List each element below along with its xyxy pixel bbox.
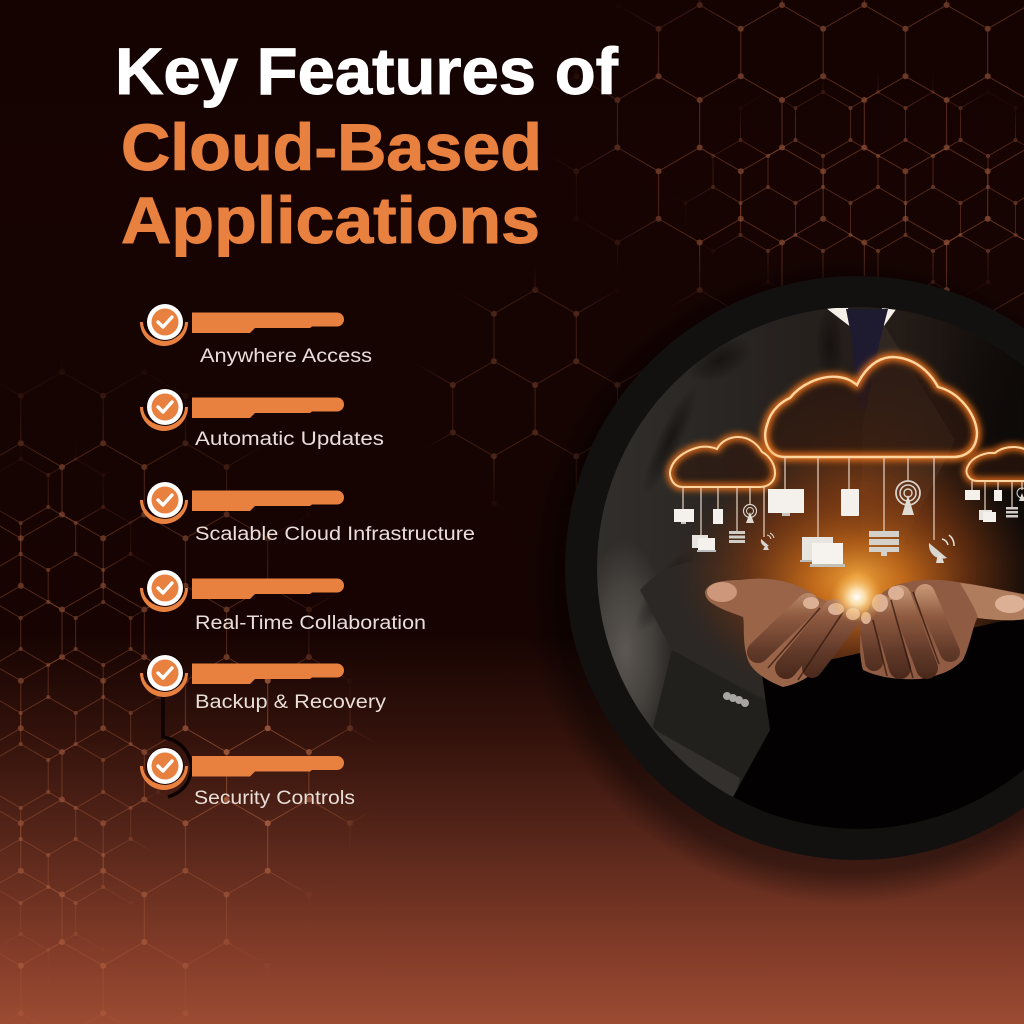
orange label bar bbox=[192, 312, 344, 333]
icon: server bbox=[729, 531, 745, 543]
thumb highlight bbox=[960, 583, 1024, 620]
device icons: large cloud bbox=[768, 481, 954, 567]
shirt collar bbox=[827, 308, 896, 326]
thumb and palm bbox=[860, 580, 1024, 679]
background hexagon network: top right bbox=[421, 0, 1024, 505]
icon: check badge bbox=[140, 481, 188, 524]
checklist item: Automatic Updates bbox=[140, 388, 384, 450]
photo: businessman holding glowing clouds bbox=[580, 300, 1024, 840]
suit shading bbox=[580, 300, 1024, 800]
icon: monitor bbox=[965, 490, 980, 500]
background hexagon network: left and bottom bbox=[0, 369, 370, 1016]
label: Automatic Updates bbox=[195, 429, 384, 450]
label: Backup & Recovery bbox=[195, 692, 387, 713]
orange label bar bbox=[192, 398, 344, 418]
label: Security Controls bbox=[194, 788, 355, 809]
suit base bbox=[597, 307, 951, 736]
icon: check badge bbox=[140, 747, 188, 790]
orange label bar bbox=[192, 756, 344, 776]
title line: Applications: Applications bbox=[121, 183, 540, 257]
thumb and palm bbox=[705, 578, 828, 687]
lower black shadow bbox=[730, 615, 1024, 840]
circle shadow bbox=[523, 255, 1024, 905]
checklist item: Anywhere Access bbox=[140, 303, 372, 367]
label: Real-Time Collaboration bbox=[195, 613, 426, 634]
icon: monitor bbox=[768, 489, 804, 516]
icon: tablet bbox=[994, 490, 1002, 501]
title bbox=[115, 34, 619, 257]
checklist item: Real-Time Collaboration bbox=[140, 569, 426, 634]
orange label bar bbox=[192, 578, 344, 599]
icon: satellite dish bbox=[929, 535, 954, 563]
fingertips bbox=[861, 586, 1024, 624]
title line: Cloud-Based: Cloud-Based bbox=[121, 110, 542, 184]
orange label bar bbox=[192, 490, 344, 511]
connector line between last checklist items bbox=[163, 695, 192, 797]
icon: check badge bbox=[140, 303, 188, 346]
icon: monitor bbox=[674, 509, 694, 524]
icon: check badge bbox=[140, 388, 188, 431]
cloud: small left bbox=[670, 437, 775, 487]
title line: Key Features of: Key Features of bbox=[115, 34, 619, 108]
label: Anywhere Access bbox=[200, 346, 372, 367]
cloud: small right bbox=[966, 447, 1024, 481]
dark ring frame bbox=[565, 276, 1024, 860]
hand: left bbox=[705, 579, 860, 687]
hand: right bbox=[860, 580, 1024, 679]
hanging device lines bbox=[683, 457, 1022, 540]
device icons: small left cloud bbox=[674, 504, 774, 552]
fingers bbox=[868, 594, 950, 668]
checklist item: Scalable Cloud Infrastructure bbox=[140, 481, 475, 545]
icon: antenna tower bbox=[744, 504, 756, 523]
finger separations bbox=[873, 592, 939, 678]
icon: laptops bbox=[800, 537, 845, 567]
checklist item: Backup & Recovery bbox=[140, 654, 387, 713]
orange label bar bbox=[192, 664, 344, 684]
checklist item: Security Controls bbox=[140, 747, 355, 809]
icon: check badge bbox=[140, 569, 188, 612]
fingers bbox=[758, 604, 852, 668]
fingertips bbox=[803, 597, 860, 620]
finger separations bbox=[768, 608, 843, 680]
warm light from hands bbox=[690, 464, 1024, 664]
tie bbox=[846, 309, 888, 396]
label: Scalable Cloud Infrastructure bbox=[195, 524, 475, 545]
sparkle of light above hands bbox=[831, 571, 883, 623]
hand: thumb highlight bbox=[707, 582, 737, 602]
cloud: large bbox=[765, 357, 977, 457]
icon: antenna tower bbox=[1017, 488, 1024, 501]
icon: tablet bbox=[713, 509, 723, 524]
icon: server bbox=[869, 531, 899, 556]
icon: server bbox=[1006, 507, 1018, 518]
icon: satellite dish bbox=[761, 533, 774, 550]
icon: antenna tower bbox=[896, 481, 920, 515]
icon: tablet bbox=[841, 489, 859, 516]
icon: laptops bbox=[692, 535, 716, 552]
device icons: small right cloud bbox=[965, 488, 1024, 522]
icon: laptops bbox=[979, 510, 996, 522]
icon: check badge bbox=[140, 654, 188, 697]
cuff buttons bbox=[723, 692, 749, 707]
